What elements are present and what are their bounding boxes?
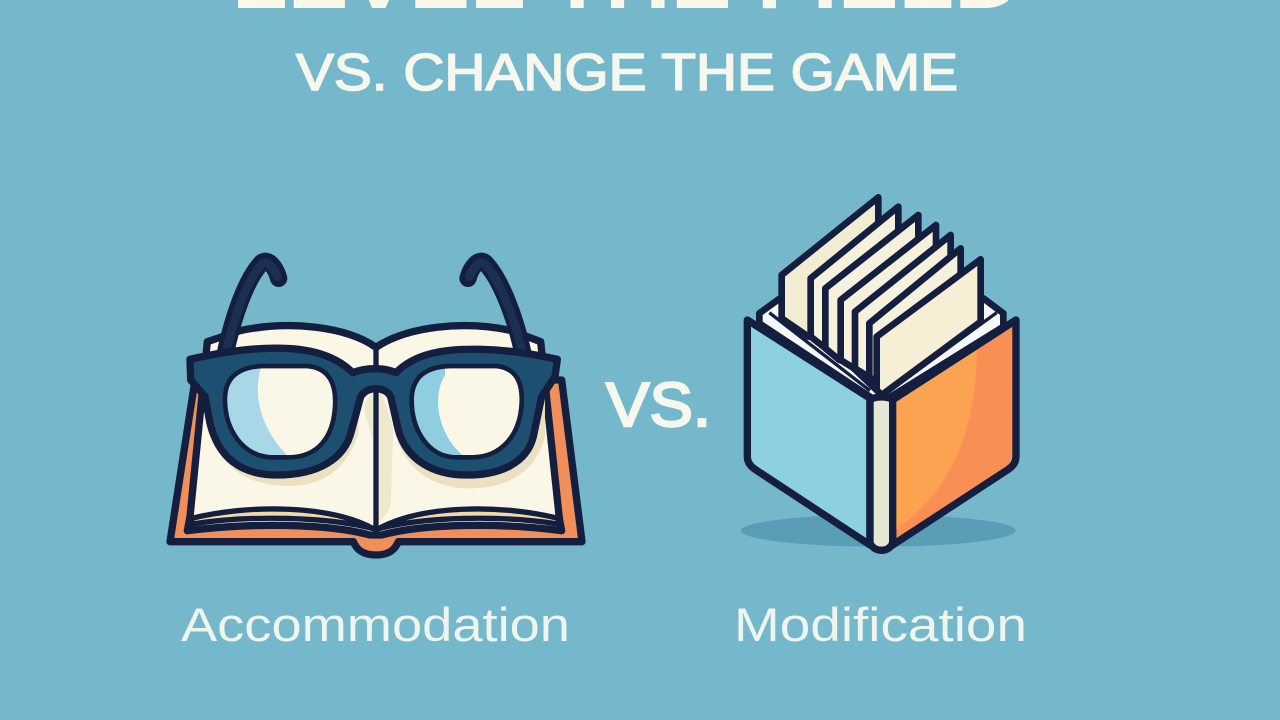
blue cover [747, 320, 870, 545]
label: accommodation: Accommodation [181, 598, 570, 651]
page stack [782, 197, 981, 395]
glasses frame [190, 348, 557, 475]
book cover [170, 380, 582, 555]
icon: book with many pages [741, 197, 1016, 550]
right page block [379, 509, 558, 529]
book pages [187, 326, 562, 535]
ground shadow [741, 515, 1016, 547]
inner cover back [759, 298, 1003, 403]
left page block [192, 509, 373, 529]
icon: open book with glasses [170, 261, 582, 555]
vs. label: VS. [606, 371, 711, 440]
glasses temple left [225, 261, 279, 355]
orange cover [893, 320, 1016, 545]
book spine line [368, 347, 384, 532]
book spine [870, 397, 893, 550]
left lens [225, 363, 350, 460]
right lens [412, 363, 527, 460]
subtitle: vs. change the game: VS. CHANGE THE GAME [296, 44, 958, 102]
glasses shadow [207, 397, 358, 486]
label: modification: Modification [734, 598, 1027, 651]
glasses temple right [468, 261, 523, 355]
